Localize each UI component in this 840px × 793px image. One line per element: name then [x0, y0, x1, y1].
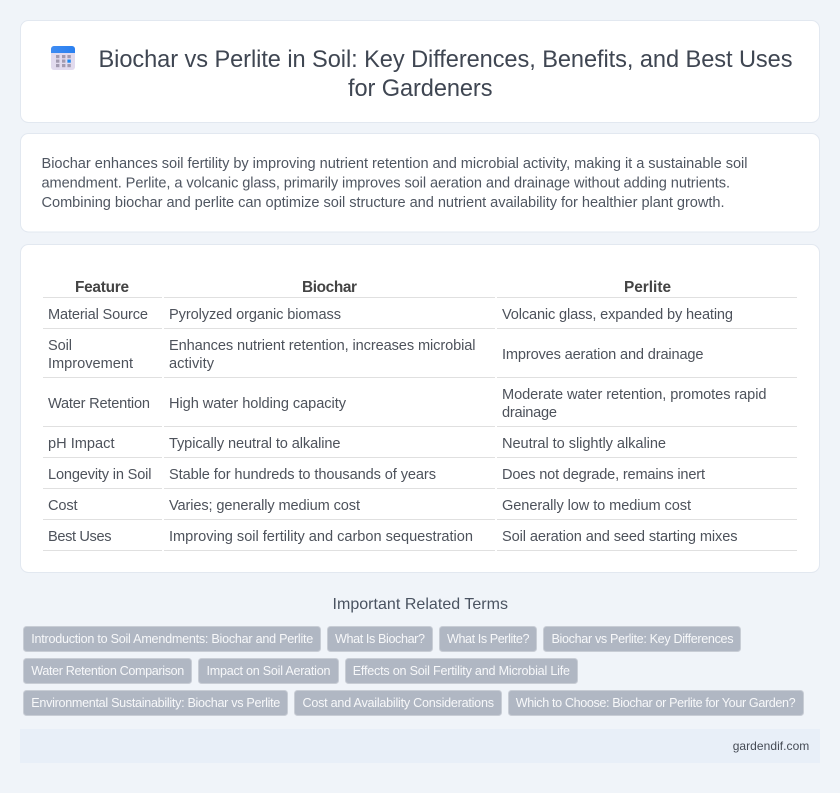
- tag: soil aeration: Impact on Soil Aeration: [206, 664, 330, 678]
- row: longevity in soil: Does not degrade, remains inert: [502, 467, 705, 483]
- row: water retention: drainage: [502, 405, 557, 421]
- heading: important related terms: Important Related Terms: [332, 596, 508, 613]
- row: soil improvement: activity: [169, 356, 215, 372]
- tag: cost and availability: [294, 690, 502, 716]
- title: Biochar vs Perlite in Soil: Key Differences, Benefits, and Best Uses: [98, 47, 792, 73]
- row: best uses: Best Uses: [48, 529, 112, 545]
- tag: introduction: [24, 626, 320, 652]
- text block: summary: Biochar enhances soil fertility by improving nutrient retention and microbial activity, making it a sustainable soil: [42, 156, 748, 172]
- row: cost: Cost: [48, 498, 78, 514]
- row: pH impact: Typically neutral to alkaline: [169, 436, 340, 452]
- row: material source: Pyrolyzed organic biomass: [169, 307, 341, 323]
- tag: which to choose: Which to Choose: Biochar or Perlite for Your Garden?: [516, 696, 796, 710]
- tag: what is biochar: [328, 626, 432, 652]
- tag: what is perlite: [440, 626, 536, 652]
- row: material source: Volcanic glass, expanded by heating: [502, 307, 733, 323]
- text block: summary: amendment. Perlite, a volcanic glass, primarily improves soil aeration and drainage without adding nutrients.: [42, 176, 730, 192]
- footer bar: [20, 729, 820, 763]
- row: pH impact: pH Impact: [48, 436, 114, 452]
- row: water retention: Moderate water retention, promotes rapid: [502, 387, 766, 403]
- tag: what is perlite: What Is Perlite?: [447, 632, 530, 646]
- tag: introduction: Introduction to Soil Amendments: Biochar and Perlite: [31, 632, 313, 646]
- table header row: Biochar: [302, 279, 357, 296]
- row: best uses: [48, 529, 738, 545]
- tag: what is biochar: What Is Biochar?: [335, 632, 425, 646]
- row: water retention: [48, 387, 766, 421]
- tag: key differences: [544, 626, 740, 652]
- row: longevity in soil: [48, 467, 705, 483]
- tag: cost and availability: Cost and Availability Considerations: [302, 696, 494, 710]
- icon: calendar: [51, 46, 75, 70]
- row: material source: [48, 307, 733, 323]
- row: material source: Material Source: [48, 307, 148, 323]
- title: for Gardeners: [348, 76, 492, 102]
- text block: summary: [42, 156, 748, 211]
- row: cost: Varies; generally medium cost: [169, 498, 360, 514]
- tag: key differences: Biochar vs Perlite: Key Differences: [552, 632, 734, 646]
- tag: water retention comparison: Water Retention Comparison: [31, 664, 184, 678]
- tag: environmental sustainability: Environmental Sustainability: Biochar vs Perlite: [31, 696, 280, 710]
- row: best uses: Soil aeration and seed starting mixes: [502, 529, 738, 545]
- title: [98, 47, 792, 102]
- tag: environmental sustainability: [24, 690, 288, 716]
- row: soil improvement: Enhances nutrient retention, increases microbial: [169, 338, 476, 354]
- text block: summary: Combining biochar and perlite can optimize soil structure and nutrient availability for healthier plant growth.: [42, 195, 724, 211]
- row: soil improvement: [48, 338, 704, 372]
- row: longevity in soil: Stable for hundreds to thousands of years: [169, 467, 436, 483]
- table header row: Feature: [75, 279, 129, 296]
- row: cost: Generally low to medium cost: [502, 498, 691, 514]
- panel: header: [20, 20, 820, 122]
- tag: soil fertility: Effects on Soil Fertility and Microbial Life: [353, 664, 570, 678]
- row: water retention: Water Retention: [48, 396, 150, 412]
- tag: water retention comparison: [24, 658, 192, 684]
- row: best uses: Improving soil fertility and carbon sequestration: [169, 529, 473, 545]
- row: water retention: High water holding capacity: [169, 396, 347, 412]
- row: pH impact: [48, 436, 666, 452]
- tag: soil fertility: [346, 658, 578, 684]
- related terms tags: [24, 626, 804, 716]
- panel: description: [20, 134, 820, 232]
- row: longevity in soil: Longevity in Soil: [48, 467, 152, 483]
- tag: soil aeration: [198, 658, 338, 684]
- row: soil improvement: Soil: [48, 338, 72, 354]
- row: soil improvement: Improves aeration and drainage: [502, 347, 704, 363]
- row: cost: [48, 498, 691, 514]
- table header row: [75, 279, 671, 296]
- table header row: Perlite: [624, 279, 671, 296]
- row: pH impact: Neutral to slightly alkaline: [502, 436, 666, 452]
- footer source text: gardendif.com: [733, 739, 809, 753]
- panel: comparison table: [20, 244, 820, 572]
- row: soil improvement: Improvement: [48, 356, 133, 372]
- tag: which to choose: [508, 690, 804, 716]
